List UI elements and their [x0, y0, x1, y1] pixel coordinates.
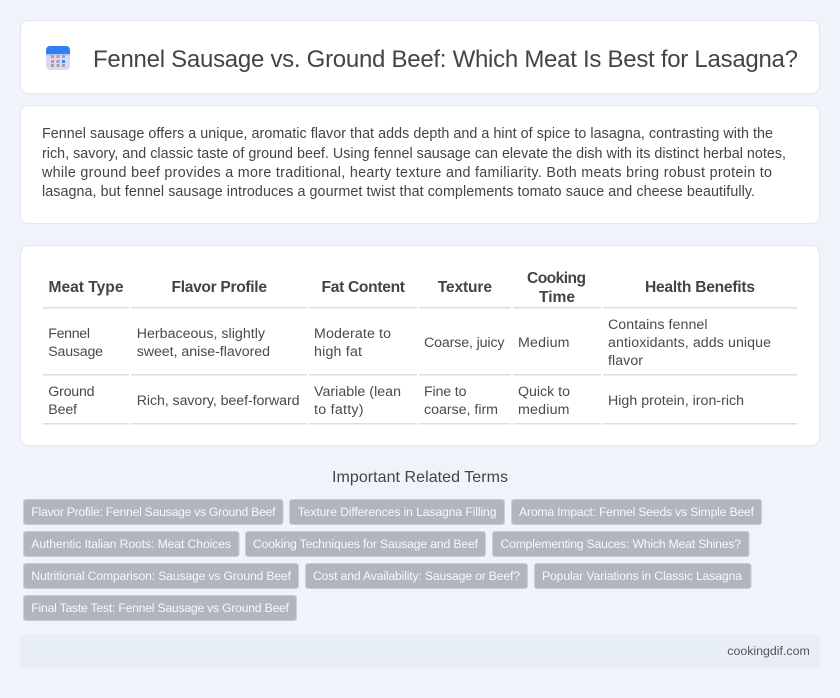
tag: popular variations	[534, 564, 751, 588]
tag: aroma impact	[512, 500, 762, 524]
tag: italian roots: Authentic Italian Roots: Meat Choices	[31, 537, 231, 551]
table row: ground beef: High protein, iron-rich	[608, 393, 744, 409]
tag: flavor profile: Flavor Profile: Fennel Sausage vs Ground Beef	[31, 505, 276, 519]
text block: introduction paragraph	[41, 126, 786, 200]
tag: cooking techniques	[246, 532, 486, 556]
table row: ground beef: Quick to	[518, 384, 570, 400]
table row: ground beef: Variable (lean	[314, 384, 401, 400]
table header row: Meat Type	[48, 279, 124, 296]
table row: ground beef: Ground	[48, 384, 94, 400]
tag: flavor profile	[24, 500, 283, 524]
table row: fennel sausage: antioxidants, adds unique	[608, 335, 771, 351]
table row: fennel sausage: sweet, anise-flavored	[137, 344, 270, 360]
tag: texture differences: Texture Differences in Lasagna Filling	[298, 505, 496, 519]
tag: aroma impact: Aroma Impact: Fennel Seeds vs Simple Beef	[519, 505, 755, 519]
table header row: Time	[539, 289, 575, 306]
panel: introduction	[20, 106, 820, 224]
text block: introduction paragraph: while ground beef provides a more traditional, hearty texture and familiarity. Both meats bring robust protein to	[41, 165, 772, 181]
table row: ground beef: Rich, savory, beef-forward	[137, 393, 300, 409]
table row: ground beef: coarse, firm	[424, 402, 498, 418]
tag: nutritional comparison: Nutritional Comparison: Sausage vs Ground Beef	[31, 569, 292, 583]
tag: cost and availability: Cost and Availability: Sausage or Beef?	[313, 569, 520, 583]
footer	[20, 634, 820, 668]
table header row: Flavor Profile	[172, 279, 267, 296]
tag: texture differences	[290, 500, 504, 524]
tag: italian roots	[24, 532, 239, 556]
table row: fennel sausage: flavor	[608, 353, 643, 369]
text block: introduction paragraph: lasagna, but fennel sausage introduces a gourmet twist that complements tomato sauce and cheese beautifully.	[42, 184, 755, 200]
table row: fennel sausage: Contains fennel	[608, 317, 708, 333]
table row: ground beef: Beef	[48, 402, 77, 418]
table row: fennel sausage	[48, 317, 771, 369]
text block: introduction paragraph: rich, savory, and classic taste of ground beef. Using fennel sausage can elevate the dish with its distinct herbal notes,	[42, 146, 786, 162]
tag: cost and availability	[306, 564, 528, 588]
table header row: Health Benefits	[645, 279, 755, 296]
table row: ground beef: Fine to	[424, 384, 467, 400]
tag: final taste test: Final Taste Test: Fennel Sausage vs Ground Beef	[31, 601, 290, 615]
tag: complementing sauces: Complementing Sauces: Which Meat Shines?	[500, 537, 741, 551]
tag: final taste test	[24, 596, 296, 620]
tag: nutritional comparison	[24, 564, 298, 588]
panel: comparison table	[20, 246, 820, 446]
table row: fennel sausage: Moderate to	[314, 326, 391, 342]
table row: fennel sausage: Medium	[518, 335, 570, 351]
icon: calendar	[46, 46, 70, 70]
related term tags	[24, 500, 762, 620]
text block: introduction paragraph: Fennel sausage offers a unique, aromatic flavor that adds depth and a hint of spice to lasagna, contrasting with the	[42, 126, 773, 142]
footer source: cookingdif.com	[727, 644, 810, 658]
table row: ground beef	[48, 384, 744, 418]
table header row: Fat Content	[322, 279, 405, 296]
table row: ground beef: to fatty)	[314, 402, 364, 418]
table row: fennel sausage: Sausage	[48, 344, 103, 360]
table row: fennel sausage: high fat	[314, 344, 362, 360]
table header row: Cooking	[527, 270, 586, 287]
table header row: Texture	[438, 279, 492, 296]
table row: ground beef: medium	[518, 402, 570, 418]
title: Fennel Sausage vs. Ground Beef: Which Meat Is Best for Lasagna?	[93, 46, 798, 73]
table header row	[48, 270, 755, 306]
table row: fennel sausage: Fennel	[48, 326, 90, 342]
tag: complementing sauces	[492, 532, 749, 556]
header panel	[20, 20, 820, 94]
tag: popular variations: Popular Variations in Classic Lasagna	[542, 569, 742, 583]
tag: cooking techniques: Cooking Techniques for Sausage and Beef	[253, 537, 479, 551]
heading: related terms: Important Related Terms	[332, 469, 508, 486]
table row: fennel sausage: Herbaceous, slightly	[137, 326, 266, 342]
table row: fennel sausage: Coarse, juicy	[424, 335, 505, 351]
